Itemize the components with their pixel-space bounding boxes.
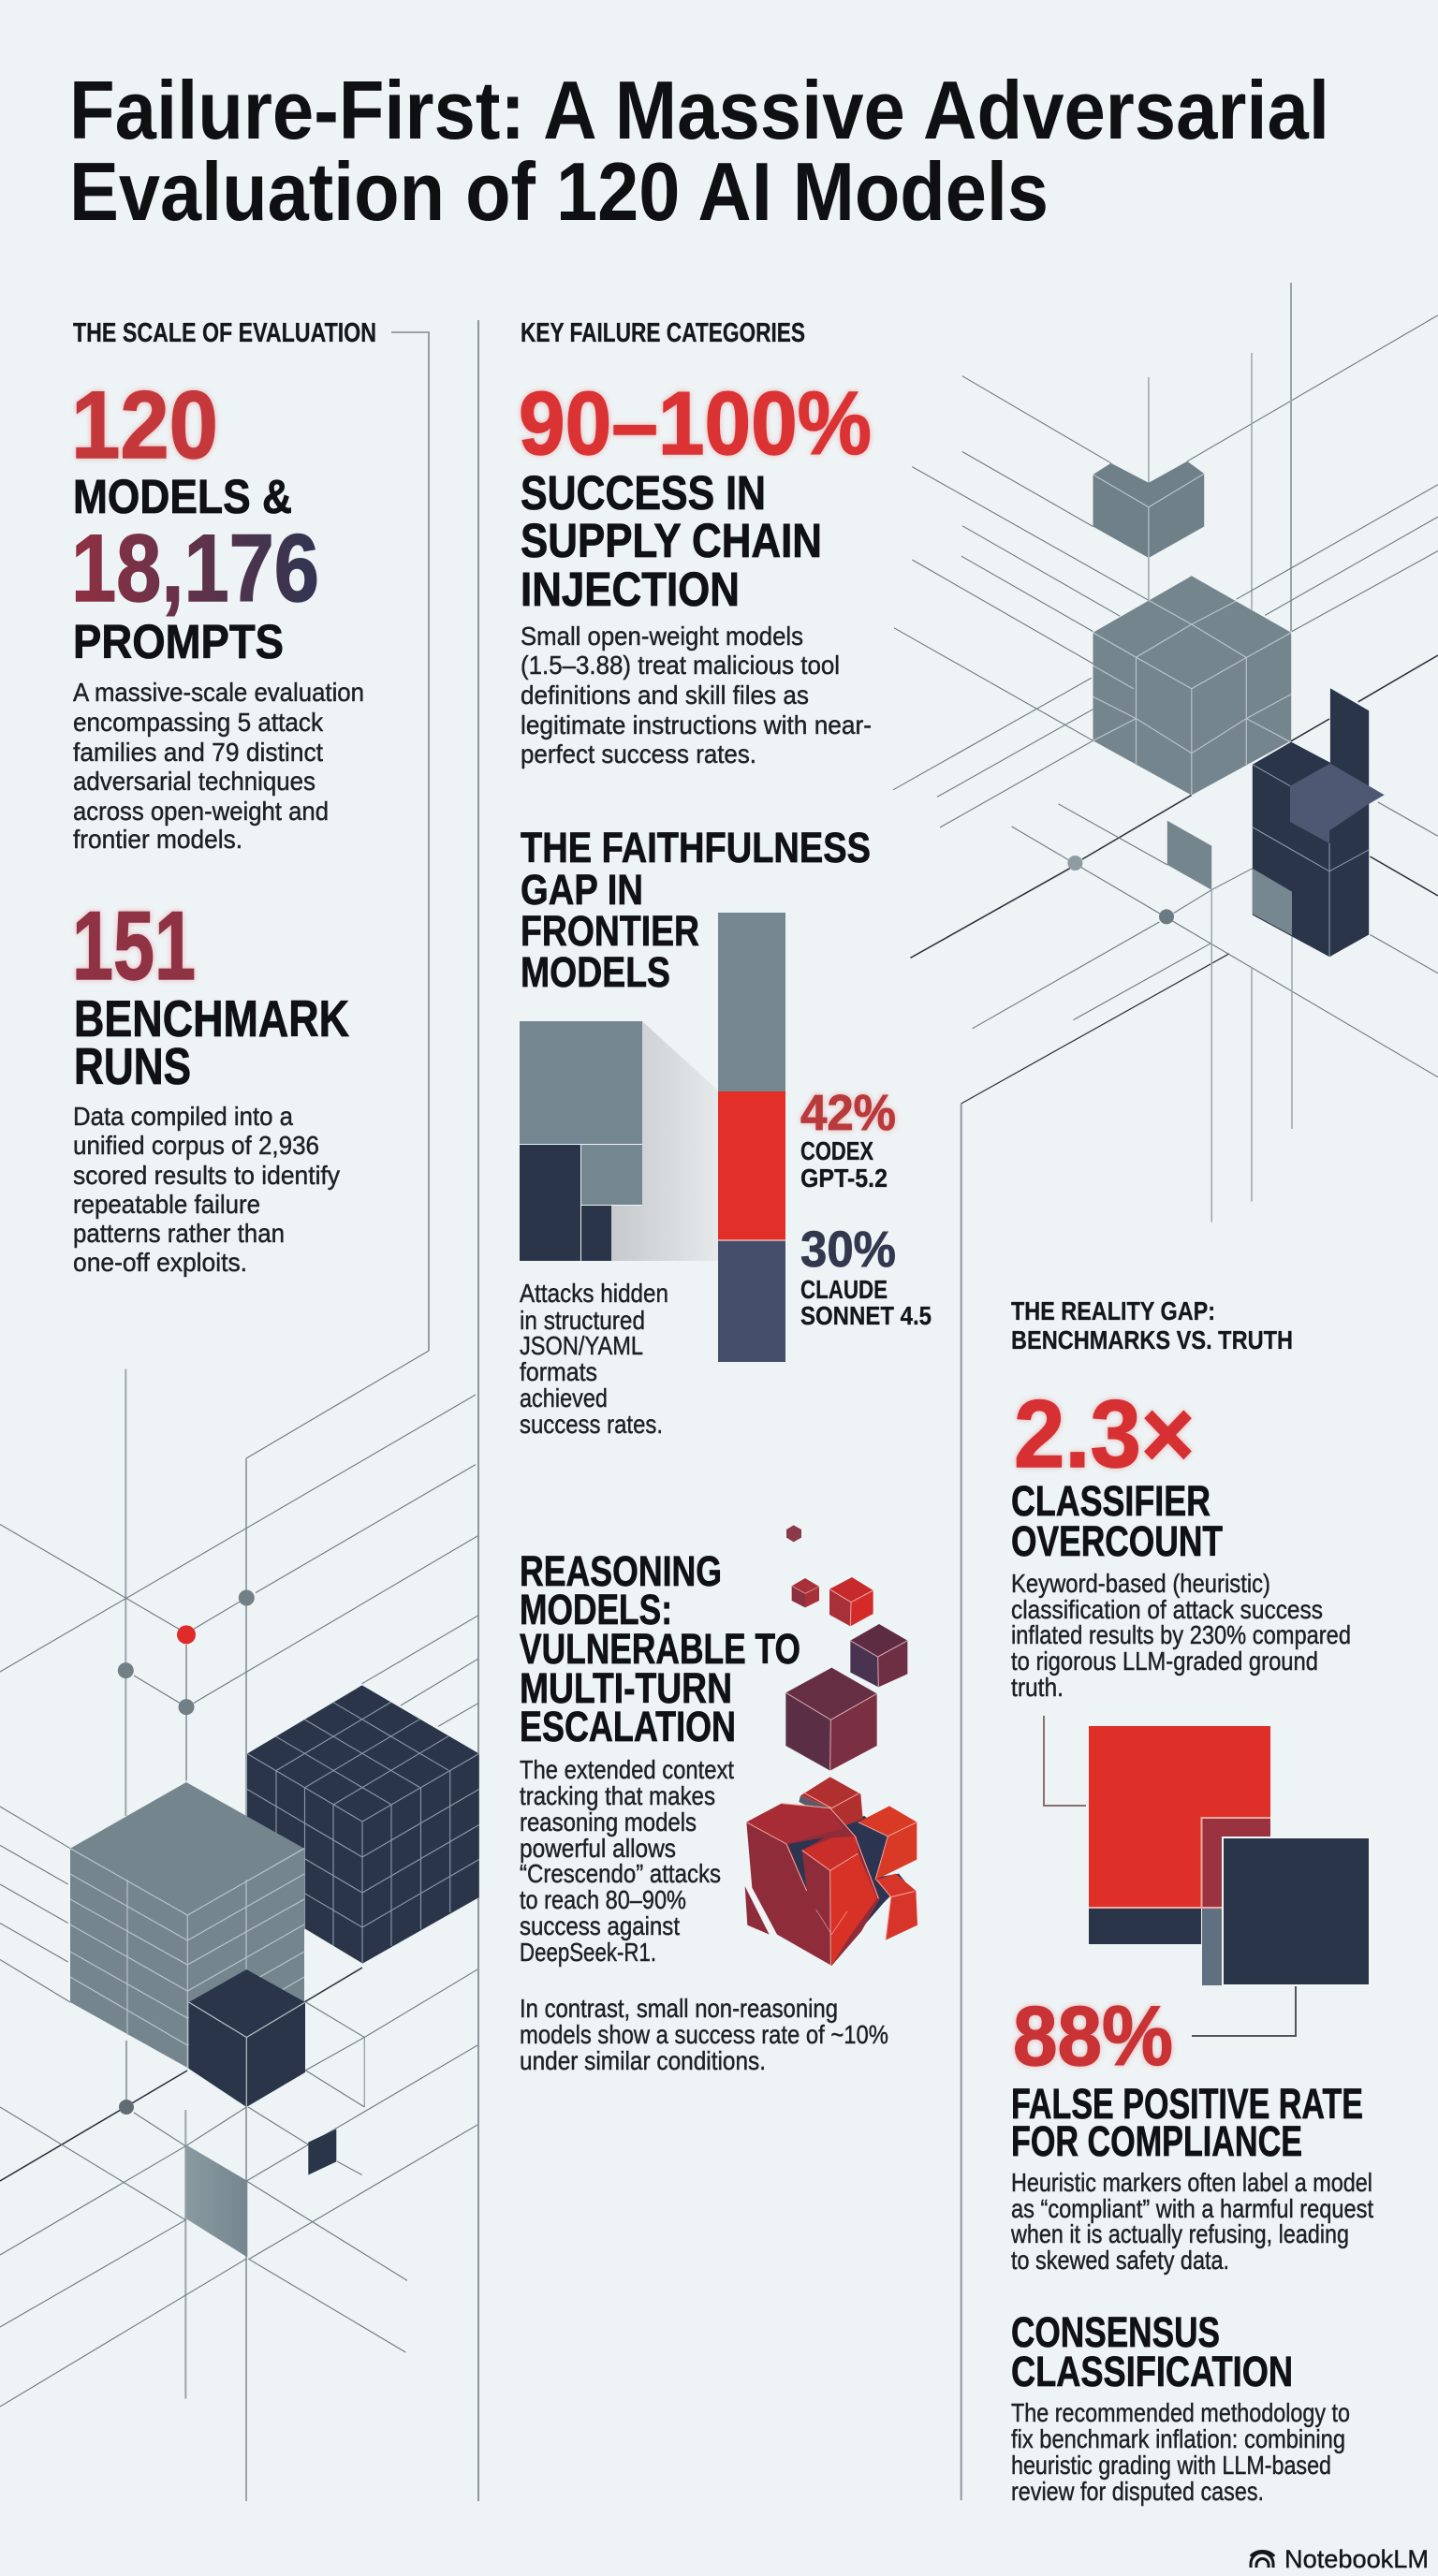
- text block: evaluation summary: [73, 678, 364, 854]
- stat: 151 benchmark runs: 151: [72, 892, 196, 1001]
- text block: consensus description: review for disputed cases.: [1011, 2477, 1264, 2506]
- panel: reasoning models: [520, 1525, 917, 2075]
- art: top right isometric cubes and lines: [893, 283, 1438, 1222]
- heading: false positive rate: FOR COMPLIANCE: [1011, 2117, 1302, 2165]
- icon: grey panel: [185, 2144, 247, 2258]
- chart: stacked vertical bar: [718, 913, 785, 1362]
- text block: crescendo description: success against: [520, 1911, 680, 1940]
- heading: faithfulness gap: [521, 824, 871, 996]
- heading: false positive rate: [1011, 2080, 1363, 2165]
- heading: faithfulness gap: THE FAITHFULNESS: [521, 824, 871, 871]
- stat: 30% claude: 30%: [800, 1222, 896, 1278]
- text block: benchmark description: [73, 1102, 340, 1277]
- text block: false positive description: Heuristic markers often label a model: [1011, 2168, 1372, 2197]
- section label: KEY FAILURE CATEGORIES: [521, 318, 805, 348]
- text block: contrast note: models show a success rate of ~10%: [520, 2020, 888, 2049]
- stat: 30% claude: SONNET 4.5: [800, 1301, 932, 1330]
- node: light grey: [1067, 856, 1082, 871]
- stat: 18,176 prompts: [71, 515, 319, 668]
- text block: evaluation summary: encompassing 5 attack: [73, 708, 324, 737]
- title: Failure-First: A Massive Adversarial: [69, 64, 1329, 156]
- section label: [1011, 1296, 1293, 1354]
- text block: evaluation summary: A massive-scale evaluation: [73, 678, 364, 707]
- icon: shattered cube: [745, 1777, 917, 1966]
- section label: THE REALITY GAP:: [1011, 1296, 1215, 1325]
- stat: 2.3x: 2.3×: [1014, 1381, 1195, 1487]
- column divider lines: [246, 320, 1229, 2501]
- panel: the scale of evaluation: [71, 318, 376, 1277]
- text block: evaluation summary: frontier models.: [73, 825, 242, 854]
- icon: grey layered block: [70, 1782, 304, 2069]
- icon: navy grid block: [247, 1685, 479, 1964]
- icon: plum cube: [850, 1624, 907, 1687]
- text block: benchmark description: patterns rather than: [73, 1219, 285, 1248]
- text block: crescendo description: to reach 80–90%: [520, 1885, 686, 1914]
- icon: navy tower block: [1253, 688, 1385, 957]
- text block: false positive description: [1010, 2168, 1373, 2275]
- text block: attacks description: formats: [520, 1357, 597, 1386]
- node: grey 3: [178, 1699, 195, 1715]
- text block: attacks description: JSON/YAML: [520, 1331, 643, 1360]
- heading: supply chain injection: SUPPLY CHAIN: [521, 514, 822, 567]
- text block: overcount description: [1011, 1569, 1351, 1702]
- text block: overcount description: inflated results by 230% compared: [1011, 1620, 1351, 1649]
- stat: 151 benchmark runs: [72, 892, 349, 1095]
- icon: large grey cube: [1093, 576, 1291, 796]
- text block: supply chain description: definitions and skill files as: [521, 681, 809, 710]
- text block: contrast note: under similar conditions.: [520, 2046, 766, 2075]
- text block: evaluation summary: families and 79 distinct: [73, 738, 323, 767]
- text block: crescendo description: The extended context: [520, 1755, 734, 1784]
- text block: crescendo description: reasoning models: [520, 1808, 697, 1837]
- stat: 18,176 prompts: 18,176: [71, 515, 319, 622]
- text block: false positive description: when it is actually refusing, leading: [1010, 2219, 1349, 2248]
- text block: false positive description: to skewed safety data.: [1011, 2246, 1229, 2275]
- stat: 120 models: [71, 372, 292, 523]
- stat: 42% codex: 42%: [800, 1085, 896, 1141]
- chart: overlapping squares: [1044, 1716, 1370, 2036]
- heading: supply chain injection: [521, 466, 822, 616]
- text block: attacks description: success rates.: [520, 1410, 663, 1439]
- heading: classifier overcount: CLASSIFIER: [1011, 1477, 1211, 1525]
- text block: crescendo description: DeepSeek-R1.: [520, 1938, 656, 1967]
- footer: NotebookLM logo: NotebookLM: [1284, 2545, 1429, 2573]
- icon: rising and shattered red cubes: [745, 1525, 917, 1966]
- node: grey 2: [118, 1662, 134, 1678]
- icon: tiny cube: [786, 1525, 801, 1542]
- panel: faithfulness gap: [520, 824, 932, 1439]
- art: bottom left isometric blocks and lines: [0, 1368, 479, 2407]
- icon: large plum cube: [785, 1668, 877, 1771]
- heading: reasoning models: ESCALATION: [520, 1703, 736, 1750]
- heading: reasoning models: MULTI-TURN: [520, 1664, 732, 1712]
- heading: supply chain injection: SUCCESS IN: [521, 466, 766, 520]
- text block: supply chain description: legitimate instructions with near-: [521, 710, 872, 739]
- text block: benchmark description: repeatable failure: [73, 1190, 260, 1219]
- stat: 42% codex: [800, 1085, 896, 1193]
- text block: benchmark description: scored results to identify: [73, 1161, 340, 1190]
- text block: benchmark description: one-off exploits.: [73, 1248, 247, 1277]
- heading: reasoning models: VULNERABLE TO: [520, 1625, 800, 1673]
- panel: the reality gap: [1010, 1296, 1373, 2506]
- section label: THE SCALE OF EVALUATION: [73, 318, 376, 348]
- heading: classifier overcount: OVERCOUNT: [1011, 1517, 1223, 1565]
- text block: consensus description: The recommended methodology to: [1011, 2398, 1350, 2427]
- icon: small navy panel: [308, 2129, 336, 2175]
- heading: consensus classification: CLASSIFICATION: [1011, 2348, 1293, 2395]
- text block: overcount description: classification of attack success: [1011, 1595, 1323, 1624]
- text block: crescendo description: “Crescendo” attacks: [520, 1859, 721, 1888]
- heading: faithfulness gap: GAP IN: [521, 866, 643, 914]
- text block: supply chain description: Small open-weight models: [521, 622, 803, 651]
- stat: 120 models: MODELS &: [73, 470, 292, 523]
- heading: reasoning models: REASONING: [520, 1547, 722, 1595]
- text block: crescendo description: powerful allows: [520, 1834, 676, 1863]
- text block: benchmark description: Data compiled into a: [73, 1102, 293, 1131]
- panel: key failure categories: [519, 318, 872, 768]
- text block: overcount description: truth.: [1011, 1673, 1064, 1702]
- text block: contrast note: [520, 1994, 888, 2075]
- node: red: [177, 1625, 196, 1644]
- chart: treemap of structured formats: [520, 1021, 718, 1261]
- text block: overcount description: Keyword-based (heuristic): [1011, 1569, 1270, 1598]
- stat: 151 benchmark runs: BENCHMARK: [74, 989, 349, 1047]
- section label: BENCHMARKS VS. TRUTH: [1011, 1325, 1293, 1354]
- icon: notched grey cube: [1093, 461, 1204, 558]
- stat: 18,176 prompts: PROMPTS: [73, 615, 284, 668]
- text block: supply chain description: (1.5–3.88) treat malicious tool: [521, 651, 840, 680]
- text block: crescendo description: tracking that makes: [520, 1781, 715, 1810]
- stat: 42% codex: GPT-5.2: [800, 1164, 888, 1193]
- title: [69, 64, 1329, 238]
- stat: 30% claude: [800, 1222, 932, 1330]
- stat: 42% codex: CODEX: [800, 1136, 873, 1165]
- heading: consensus classification: CONSENSUS: [1011, 2308, 1220, 2356]
- text block: false positive description: as “compliant” with a harmful request: [1011, 2194, 1373, 2223]
- icon: red cube: [829, 1577, 873, 1626]
- text block: contrast note: In contrast, small non-reasoning: [520, 1994, 838, 2023]
- text block: evaluation summary: adversarial techniques: [73, 767, 315, 796]
- node: grey 4: [119, 2100, 134, 2115]
- text block: consensus description: fix benchmark inflation: combining: [1011, 2424, 1345, 2453]
- text block: attacks description: Attacks hidden: [520, 1279, 668, 1308]
- text block: attacks description: achieved: [520, 1383, 608, 1412]
- title: Evaluation of 120 AI Models: [69, 145, 1049, 238]
- text block: consensus description: heuristic grading with LLM-based: [1011, 2451, 1331, 2480]
- text block: evaluation summary: across open-weight and: [73, 797, 329, 826]
- text block: attacks description: [520, 1279, 668, 1439]
- heading: supply chain injection: INJECTION: [521, 563, 740, 616]
- text block: supply chain description: perfect success rates.: [521, 739, 756, 768]
- icon: small grey panel: [1167, 821, 1211, 890]
- heading: consensus classification: [1011, 2308, 1293, 2395]
- icon: small cube: [792, 1578, 819, 1607]
- stat: 151 benchmark runs: RUNS: [74, 1037, 191, 1095]
- heading: faithfulness gap: FRONTIER: [521, 907, 699, 955]
- text block: supply chain description: [521, 622, 872, 768]
- text block: consensus description: [1011, 2398, 1350, 2506]
- node: grey 1: [239, 1589, 255, 1606]
- heading: reasoning models: [520, 1547, 800, 1750]
- stat: 88%: 88%: [1013, 1990, 1173, 2084]
- node: dark grey: [1159, 909, 1174, 924]
- icon: small navy block: [189, 1969, 305, 2107]
- icon: NotebookLM arcs: [1251, 2552, 1274, 2568]
- text block: benchmark description: unified corpus of 2,936: [73, 1131, 319, 1160]
- heading: faithfulness gap: MODELS: [521, 948, 670, 996]
- stat: 90-100%: 90–100%: [519, 373, 872, 474]
- text block: overcount description: to rigorous LLM-graded ground: [1011, 1647, 1318, 1676]
- heading: classifier overcount: [1011, 1477, 1223, 1565]
- text block: crescendo description: [520, 1755, 734, 1967]
- text block: attacks description: in structured: [520, 1306, 645, 1335]
- stat: 30% claude: CLAUDE: [800, 1275, 888, 1304]
- stat: 120 models: 120: [71, 372, 218, 478]
- heading: reasoning models: MODELS:: [520, 1586, 672, 1633]
